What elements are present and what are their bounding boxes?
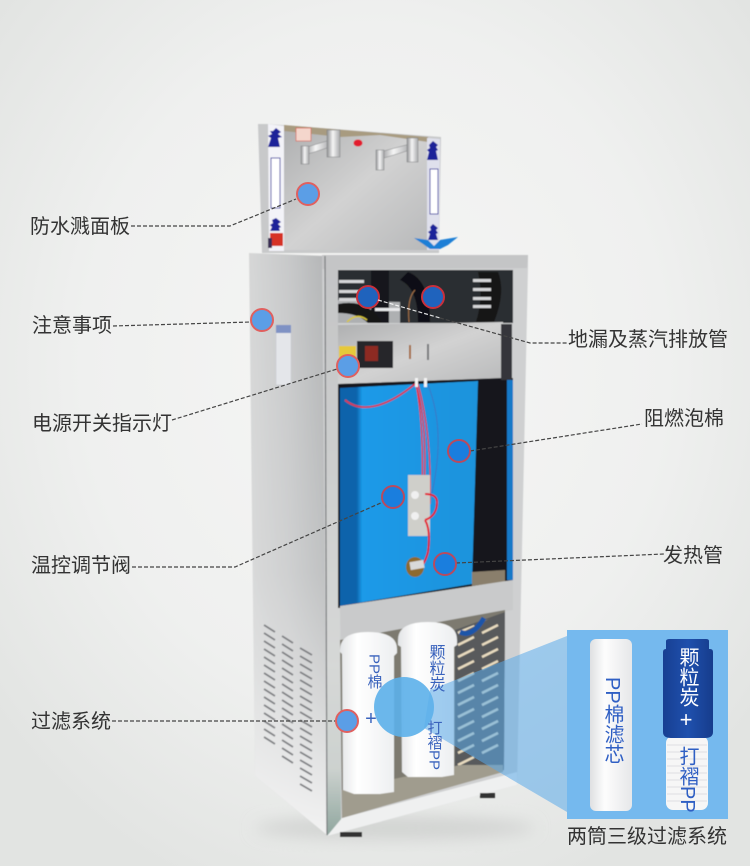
wiring <box>345 384 415 407</box>
red valve <box>270 233 283 246</box>
leader: heating tube: 发热管 <box>663 544 723 567</box>
side vents <box>264 625 312 791</box>
leader: splash panel: 防水溅面板 <box>30 215 130 238</box>
filter housing labels <box>365 644 446 770</box>
leader: thermostat valve <box>31 486 404 577</box>
leader: thermostat valve: 温控调节阀 <box>31 554 131 577</box>
leader: splash panel <box>30 183 319 238</box>
carbon and pleated cartridge: 打褶PP <box>676 746 699 813</box>
leader: notes: 注意事项 <box>32 314 112 337</box>
magnifier circle <box>374 677 434 737</box>
PP cotton cartridge <box>590 639 632 811</box>
filter callout panel <box>567 630 728 819</box>
filter housing: PP <box>340 632 397 794</box>
cabinet side panel <box>249 253 327 835</box>
filter housing labels: + <box>365 708 377 730</box>
leader: power indicator <box>32 355 359 435</box>
leader: heating tube <box>434 544 723 575</box>
heating tube fitting <box>406 557 424 577</box>
side label <box>276 325 291 385</box>
faucets <box>301 130 418 170</box>
control panel <box>338 322 512 387</box>
cabinet front frame <box>322 255 528 836</box>
carbon and pleated cartridge: + <box>680 707 692 732</box>
leader: drain and steam pipe: 地漏及蒸汽排放管 <box>568 328 728 351</box>
lower compartment <box>340 610 505 818</box>
leader: notes <box>32 309 273 337</box>
splash panel <box>258 124 458 253</box>
filter housing: carbon and pleated <box>398 622 457 777</box>
warning label <box>296 128 311 141</box>
leader: flame-retardant foam <box>448 407 724 462</box>
carbon and pleated cartridge: 颗粒炭 <box>676 647 699 707</box>
carbon and pleated cartridge <box>663 639 713 813</box>
filter housing labels: 打褶PP <box>426 720 442 770</box>
leader: filtration system: 过滤系统 <box>31 710 111 733</box>
filter housing labels: 颗粒炭 <box>426 644 446 692</box>
sticker strips <box>268 124 284 251</box>
leader: power indicator: 电源开关指示灯 <box>32 412 172 435</box>
blue insulation foam tank <box>338 378 513 640</box>
PP cotton cartridge: PP棉滤芯 <box>601 677 624 764</box>
leader: filtration system <box>31 710 358 733</box>
water dispenser machine <box>249 124 535 840</box>
callout projection beam <box>424 636 567 812</box>
blue wing nut <box>414 237 458 249</box>
upper compartment <box>338 270 513 323</box>
leader: drain and steam pipe <box>357 286 728 351</box>
filter housing labels: PP棉 <box>366 654 382 689</box>
callout caption: 两筒三级过滤系统 <box>567 825 727 848</box>
leader: flame-retardant foam: 阻燃泡棉 <box>644 407 724 430</box>
feet <box>340 832 362 837</box>
floor shadow <box>255 816 535 840</box>
